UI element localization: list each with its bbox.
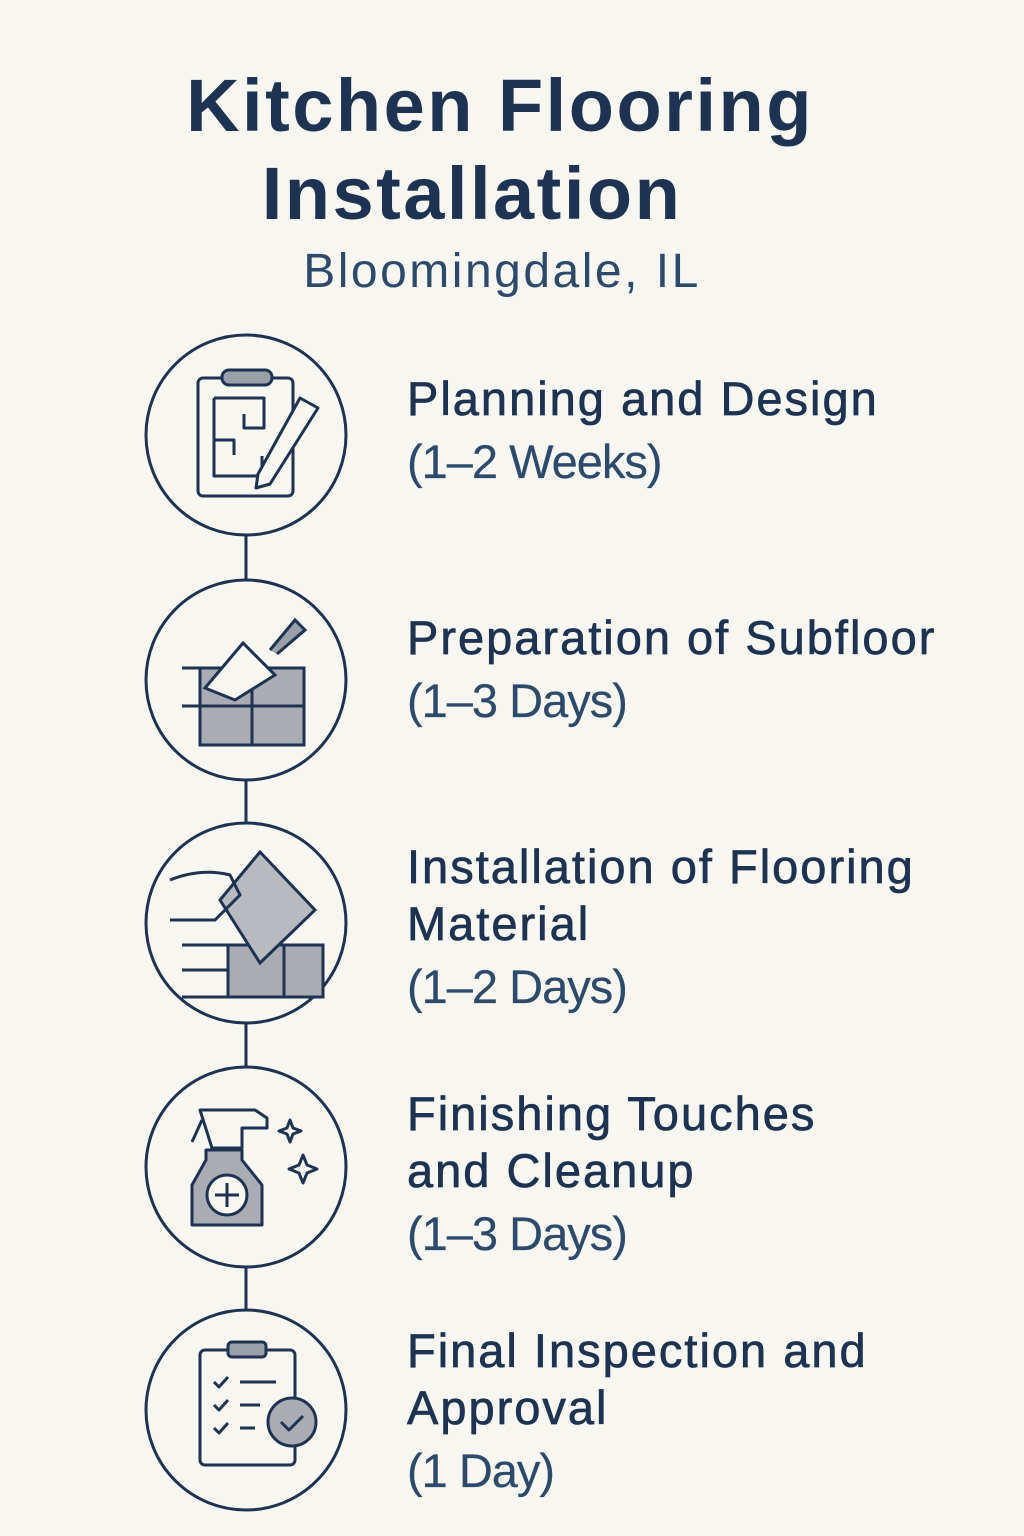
step 3 text: (1–2 Days)	[407, 960, 627, 1013]
icon: checklist	[146, 1310, 346, 1510]
step 1 text: Planning and Design	[407, 372, 879, 425]
title: Kitchen Flooring	[186, 64, 814, 147]
step 4 text: and Cleanup	[407, 1144, 696, 1197]
step 4 text: Finishing Touches	[407, 1087, 816, 1140]
step 5 text: (1 Day)	[407, 1444, 554, 1497]
step 1 text: (1–2 Weeks)	[407, 435, 662, 488]
step 4 text	[407, 1087, 816, 1260]
timeline icons	[144, 334, 348, 1512]
title: Installation	[262, 152, 682, 235]
step 5 text: Approval	[407, 1381, 608, 1434]
step 2 text: (1–3 Days)	[407, 674, 627, 727]
icon: spray bottle	[146, 1067, 346, 1267]
step 5 text: Final Inspection and	[407, 1324, 868, 1377]
step 3 text: Installation of Flooring	[407, 840, 915, 893]
step 1 text	[407, 372, 879, 488]
icon: trowel subfloor	[146, 580, 346, 780]
step 2 text: Preparation of Subfloor	[407, 611, 936, 664]
step 3 text	[407, 840, 915, 1014]
title	[186, 64, 814, 235]
icon: hand placing tile	[146, 823, 346, 1023]
step 3 text: Material	[407, 897, 590, 950]
icon: clipboard plan	[146, 335, 346, 535]
step 2 text	[407, 611, 936, 728]
step 5 text	[406, 1324, 868, 1498]
step 4 text: (1–3 Days)	[407, 1207, 627, 1260]
subtitle: Bloomingdale, IL	[303, 245, 701, 298]
